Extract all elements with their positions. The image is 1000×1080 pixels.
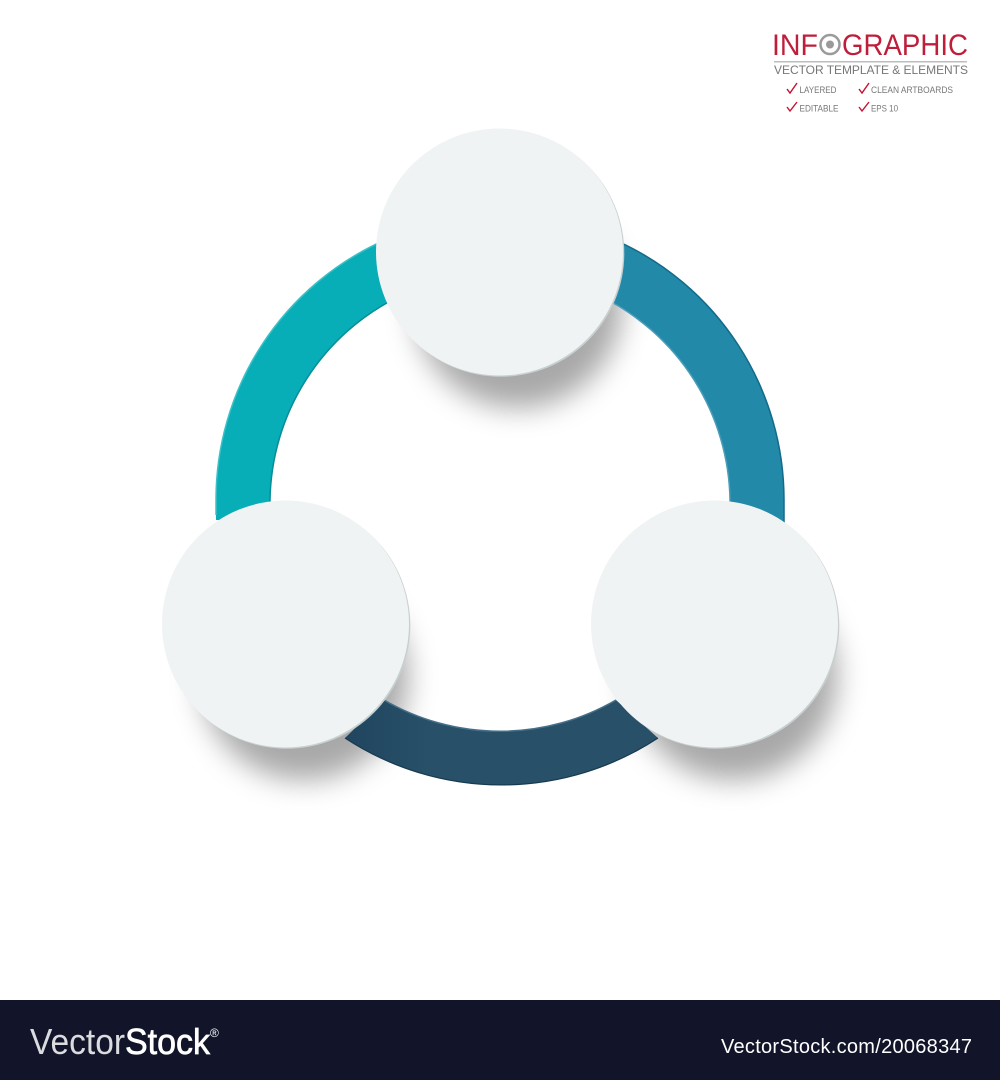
badge title: INFOGRAPHIC: INF: [772, 29, 818, 62]
feature: eps 10: EPS 10: [871, 104, 898, 114]
icon: check layered: [787, 83, 797, 93]
shadow: top circle: [414, 200, 622, 408]
badge title: INFOGRAPHIC: GRAPHIC: [842, 29, 968, 62]
feature: editable: EDITABLE: [800, 104, 838, 114]
shadow: right circle: [629, 572, 837, 780]
feature: layered: LAYERED: [800, 85, 837, 95]
disc edge: right circle: [592, 502, 839, 749]
disc: right circle: [591, 500, 838, 748]
circle node: right: [591, 500, 839, 749]
disc: left circle: [162, 500, 409, 748]
disc: top circle: [376, 128, 623, 376]
footer logo: ®: [210, 1026, 219, 1040]
badge subtitle: VECTOR TEMPLATE & ELEMENTS: [774, 63, 968, 77]
shadow: left circle: [200, 572, 408, 780]
template badge: [772, 29, 968, 114]
circle node: top: [376, 128, 624, 377]
footer logo: Vector: [30, 1021, 125, 1062]
footer logo: Stock: [125, 1021, 211, 1062]
icon: check clean artboards: [859, 83, 869, 93]
ring segment: blue right: [600, 240, 784, 530]
badge title: INFOGRAPHIC: [772, 29, 968, 62]
feature: clean artboards: CLEAN ARTBOARDS: [871, 85, 953, 95]
footer image id: VectorStock.com/20068347: [721, 1036, 972, 1058]
ring segment: navy bottom: [345, 700, 658, 785]
icon: check editable: [787, 102, 797, 111]
footer logo: [30, 1021, 219, 1062]
footer bar: [0, 1000, 1000, 1080]
icon: target letter O: [820, 35, 840, 54]
disc edge: left circle: [163, 502, 410, 749]
icon: check eps: [859, 102, 869, 111]
ring segment: teal left: [216, 240, 400, 520]
disc edge: top circle: [377, 130, 624, 377]
circle node: left: [162, 500, 410, 749]
